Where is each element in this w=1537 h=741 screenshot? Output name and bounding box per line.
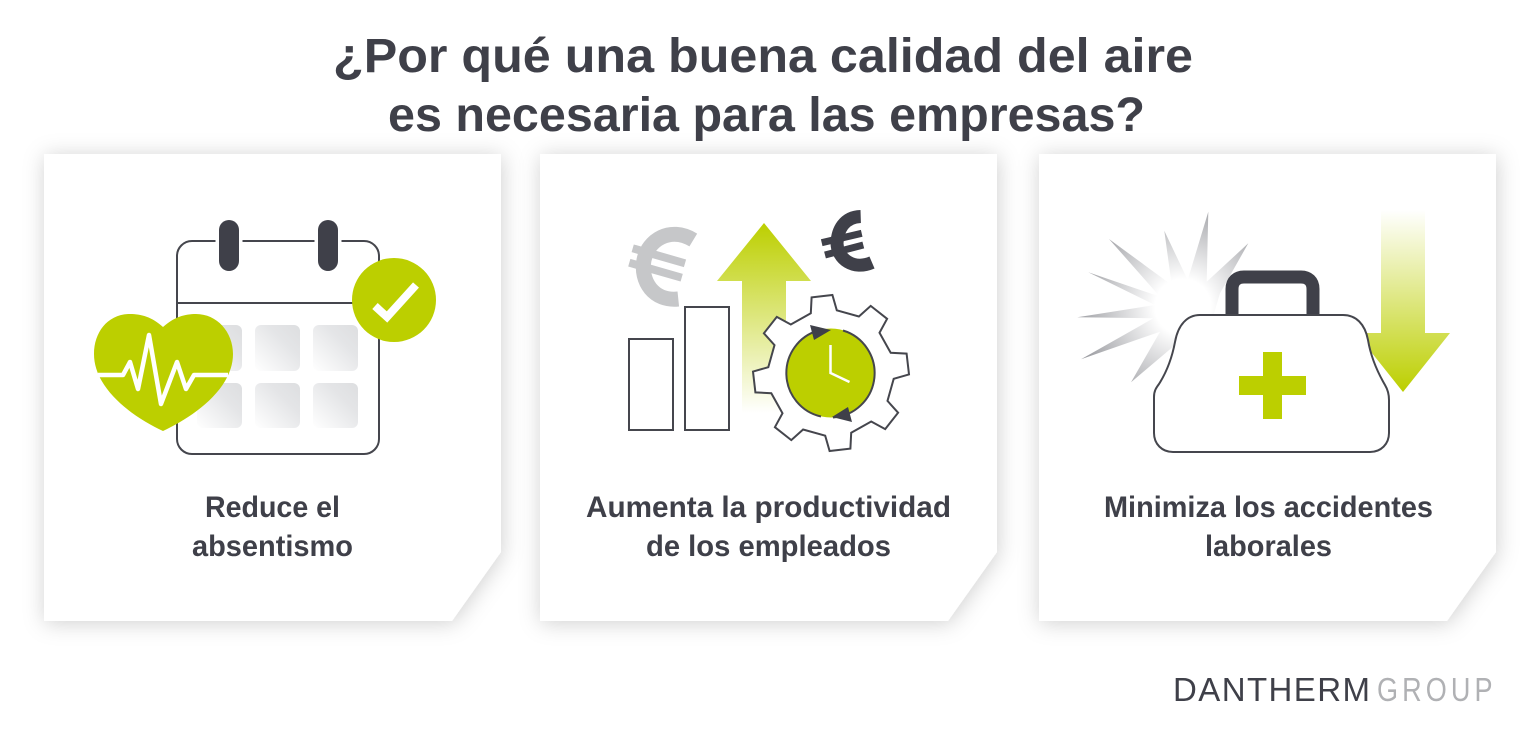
logo: Dantherm Group xyxy=(1173,671,1497,709)
card background xyxy=(44,154,501,621)
icon: impact burst xyxy=(1077,212,1248,382)
label xyxy=(192,491,353,563)
label: laborales xyxy=(1205,530,1332,563)
icon: heart with pulse xyxy=(94,314,233,431)
label: de los empleados xyxy=(646,530,891,563)
card background xyxy=(540,154,997,621)
logo: Dantherm Group: GROUP xyxy=(1377,673,1497,709)
label: Minimiza los accidentes xyxy=(1104,491,1433,524)
label: absentismo xyxy=(192,530,353,563)
label: Reduce el xyxy=(205,491,340,524)
title xyxy=(333,30,1193,142)
icon: down arrow xyxy=(1356,210,1450,392)
panel: minimise accidents xyxy=(1039,154,1496,621)
icon: check badge xyxy=(352,258,436,342)
icon: gear with clock xyxy=(753,295,909,451)
icon: medical bag xyxy=(1154,277,1389,452)
label xyxy=(1104,491,1433,563)
title: es necesaria para las empresas? xyxy=(388,89,1145,142)
icon: calendar xyxy=(177,220,379,454)
panel: increase productivity xyxy=(540,154,997,621)
title: ¿Por qué una buena calidad del aire xyxy=(333,30,1193,83)
icon: dark euro xyxy=(822,216,872,265)
icon: grey euro xyxy=(629,234,693,299)
card background xyxy=(1039,154,1496,621)
logo: Dantherm Group: DANTHERM xyxy=(1173,671,1370,708)
bar chart xyxy=(629,307,729,430)
label: Aumenta la productividad xyxy=(586,491,951,524)
icon: up arrow xyxy=(717,223,811,413)
label xyxy=(586,491,951,563)
panel: reduce absenteeism xyxy=(44,154,501,621)
